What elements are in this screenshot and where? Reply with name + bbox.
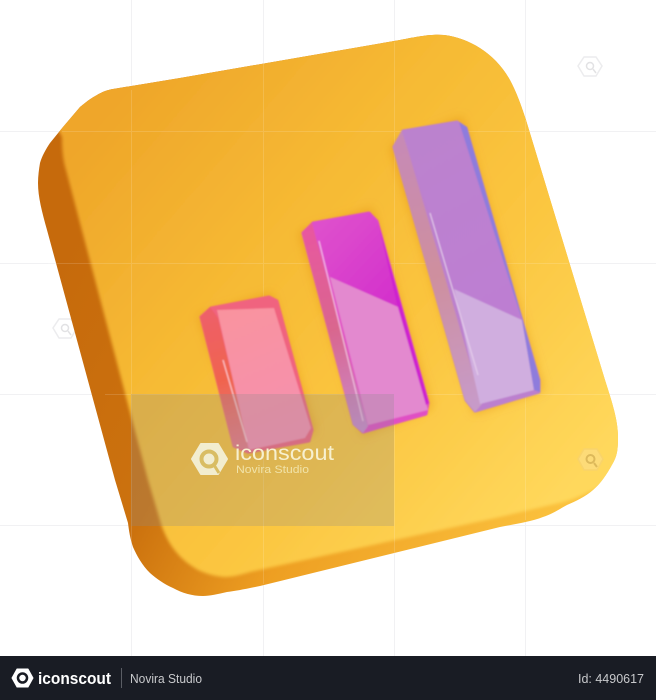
footer brand name: iconscout	[38, 669, 111, 688]
icon: faint watermark top right	[578, 57, 602, 76]
rounded square tile	[38, 34, 618, 596]
medium magenta bar	[302, 212, 429, 433]
tile face	[58, 34, 618, 578]
watermark logo	[192, 442, 334, 476]
tall purple bar	[393, 122, 540, 412]
icon: footer logo	[12, 669, 33, 687]
tile side	[30, 30, 630, 600]
icon: hexagon logo	[192, 444, 227, 474]
central watermark panel	[131, 394, 394, 526]
bar chart	[200, 122, 540, 452]
bar shadows	[198, 117, 544, 456]
footer studio name: Novira Studio	[130, 671, 202, 686]
short pink bar	[200, 297, 312, 452]
icon: faint watermark left	[53, 319, 77, 338]
icon: faint watermark on tile	[578, 449, 603, 470]
watermark studio name: Novira Studio	[236, 464, 309, 476]
footer asset id: Id: 4490617	[578, 671, 644, 686]
footer bar	[0, 656, 656, 700]
watermark brand name: iconscout	[235, 442, 334, 465]
grid over tile	[48, 42, 608, 584]
